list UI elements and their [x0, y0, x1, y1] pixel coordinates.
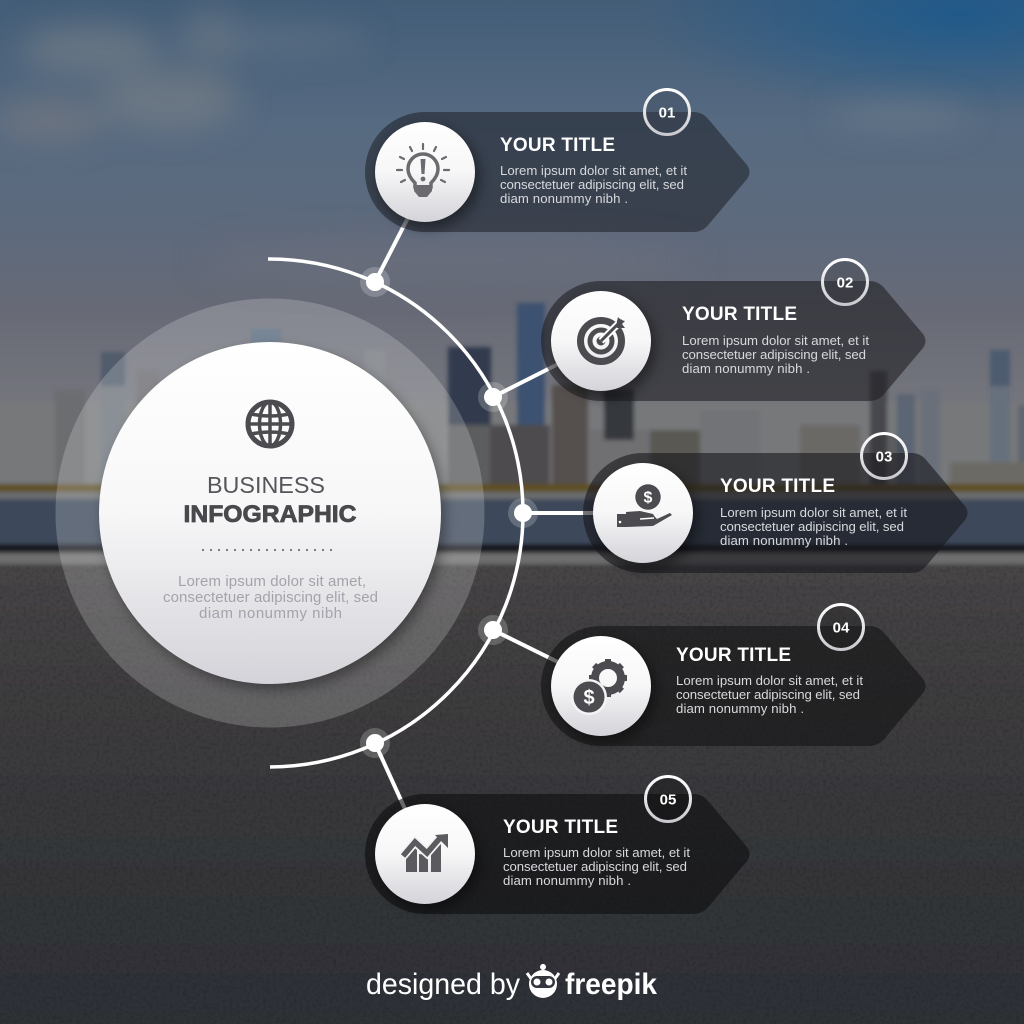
badge 01: 01	[659, 104, 675, 122]
badge 02: 02	[837, 274, 853, 292]
description: Lorem ipsum dolor sit amet, et it	[682, 333, 869, 348]
description: consectetuer adipiscing elit, sed	[500, 177, 684, 192]
description: Lorem ipsum dolor sit amet, et it	[720, 505, 907, 520]
main description: diam nonummy nibh	[199, 605, 342, 622]
icon: hand with coin	[617, 484, 672, 527]
description: diam nonummy nibh .	[682, 361, 810, 376]
badge 02	[822, 260, 868, 304]
panel 05	[365, 794, 750, 914]
title: YOUR TITLE	[720, 476, 835, 497]
panel 02	[541, 281, 926, 401]
title: YOUR TITLE	[500, 135, 615, 156]
main description: Lorem ipsum dolor sit amet,	[178, 573, 366, 590]
icon: target	[580, 317, 625, 362]
main circle	[99, 342, 445, 690]
arc with nodes	[268, 259, 538, 767]
heading	[184, 472, 356, 528]
icon: robot mascot	[527, 964, 559, 998]
badge 05: 05	[660, 792, 676, 808]
dotted divider	[203, 549, 339, 551]
icon: gear and coin: $	[583, 687, 595, 709]
main description	[163, 573, 378, 622]
badge 04	[818, 604, 864, 650]
icon: light bulb	[397, 144, 449, 197]
credit: designed by freepik: designed by	[366, 968, 520, 1001]
icon: globe	[248, 402, 292, 446]
description: diam nonummy nibh .	[720, 533, 848, 548]
panel 04	[541, 626, 926, 746]
icon: hand with coin: $	[644, 490, 653, 506]
description: consectetuer adipiscing elit, sed	[503, 859, 687, 874]
badge 03	[862, 434, 906, 478]
title: YOUR TITLE	[676, 645, 791, 666]
badge 03: 03	[876, 448, 892, 466]
description: diam nonummy nibh .	[503, 873, 631, 888]
title: YOUR TITLE	[503, 817, 618, 838]
badge 05	[646, 776, 690, 822]
description: Lorem ipsum dolor sit amet, et it	[676, 673, 863, 688]
description: consectetuer adipiscing elit, sed	[720, 519, 904, 534]
heading: BUSINESS	[207, 472, 325, 498]
icon: gear and coin	[571, 659, 627, 715]
connector lines	[375, 210, 600, 820]
panel 01	[365, 112, 750, 232]
description: diam nonummy nibh .	[676, 701, 804, 716]
title: YOUR TITLE	[682, 304, 797, 325]
icon: growth chart	[403, 834, 448, 872]
description: diam nonummy nibh .	[500, 191, 628, 206]
description: consectetuer adipiscing elit, sed	[676, 687, 860, 702]
description: Lorem ipsum dolor sit amet, et it	[500, 163, 687, 178]
panel 03	[583, 453, 968, 573]
main description: consectetuer adipiscing elit, sed	[163, 589, 378, 606]
credit: designed by freepik	[366, 964, 657, 1001]
description: Lorem ipsum dolor sit amet, et it	[503, 845, 690, 860]
badge 01	[644, 90, 690, 134]
description: consectetuer adipiscing elit, sed	[682, 347, 866, 362]
outer translucent circle	[56, 298, 484, 728]
heading: INFOGRAPHIC	[184, 501, 356, 528]
credit: designed by freepik: freepik	[565, 968, 657, 1001]
badge 04: 04	[833, 620, 850, 636]
